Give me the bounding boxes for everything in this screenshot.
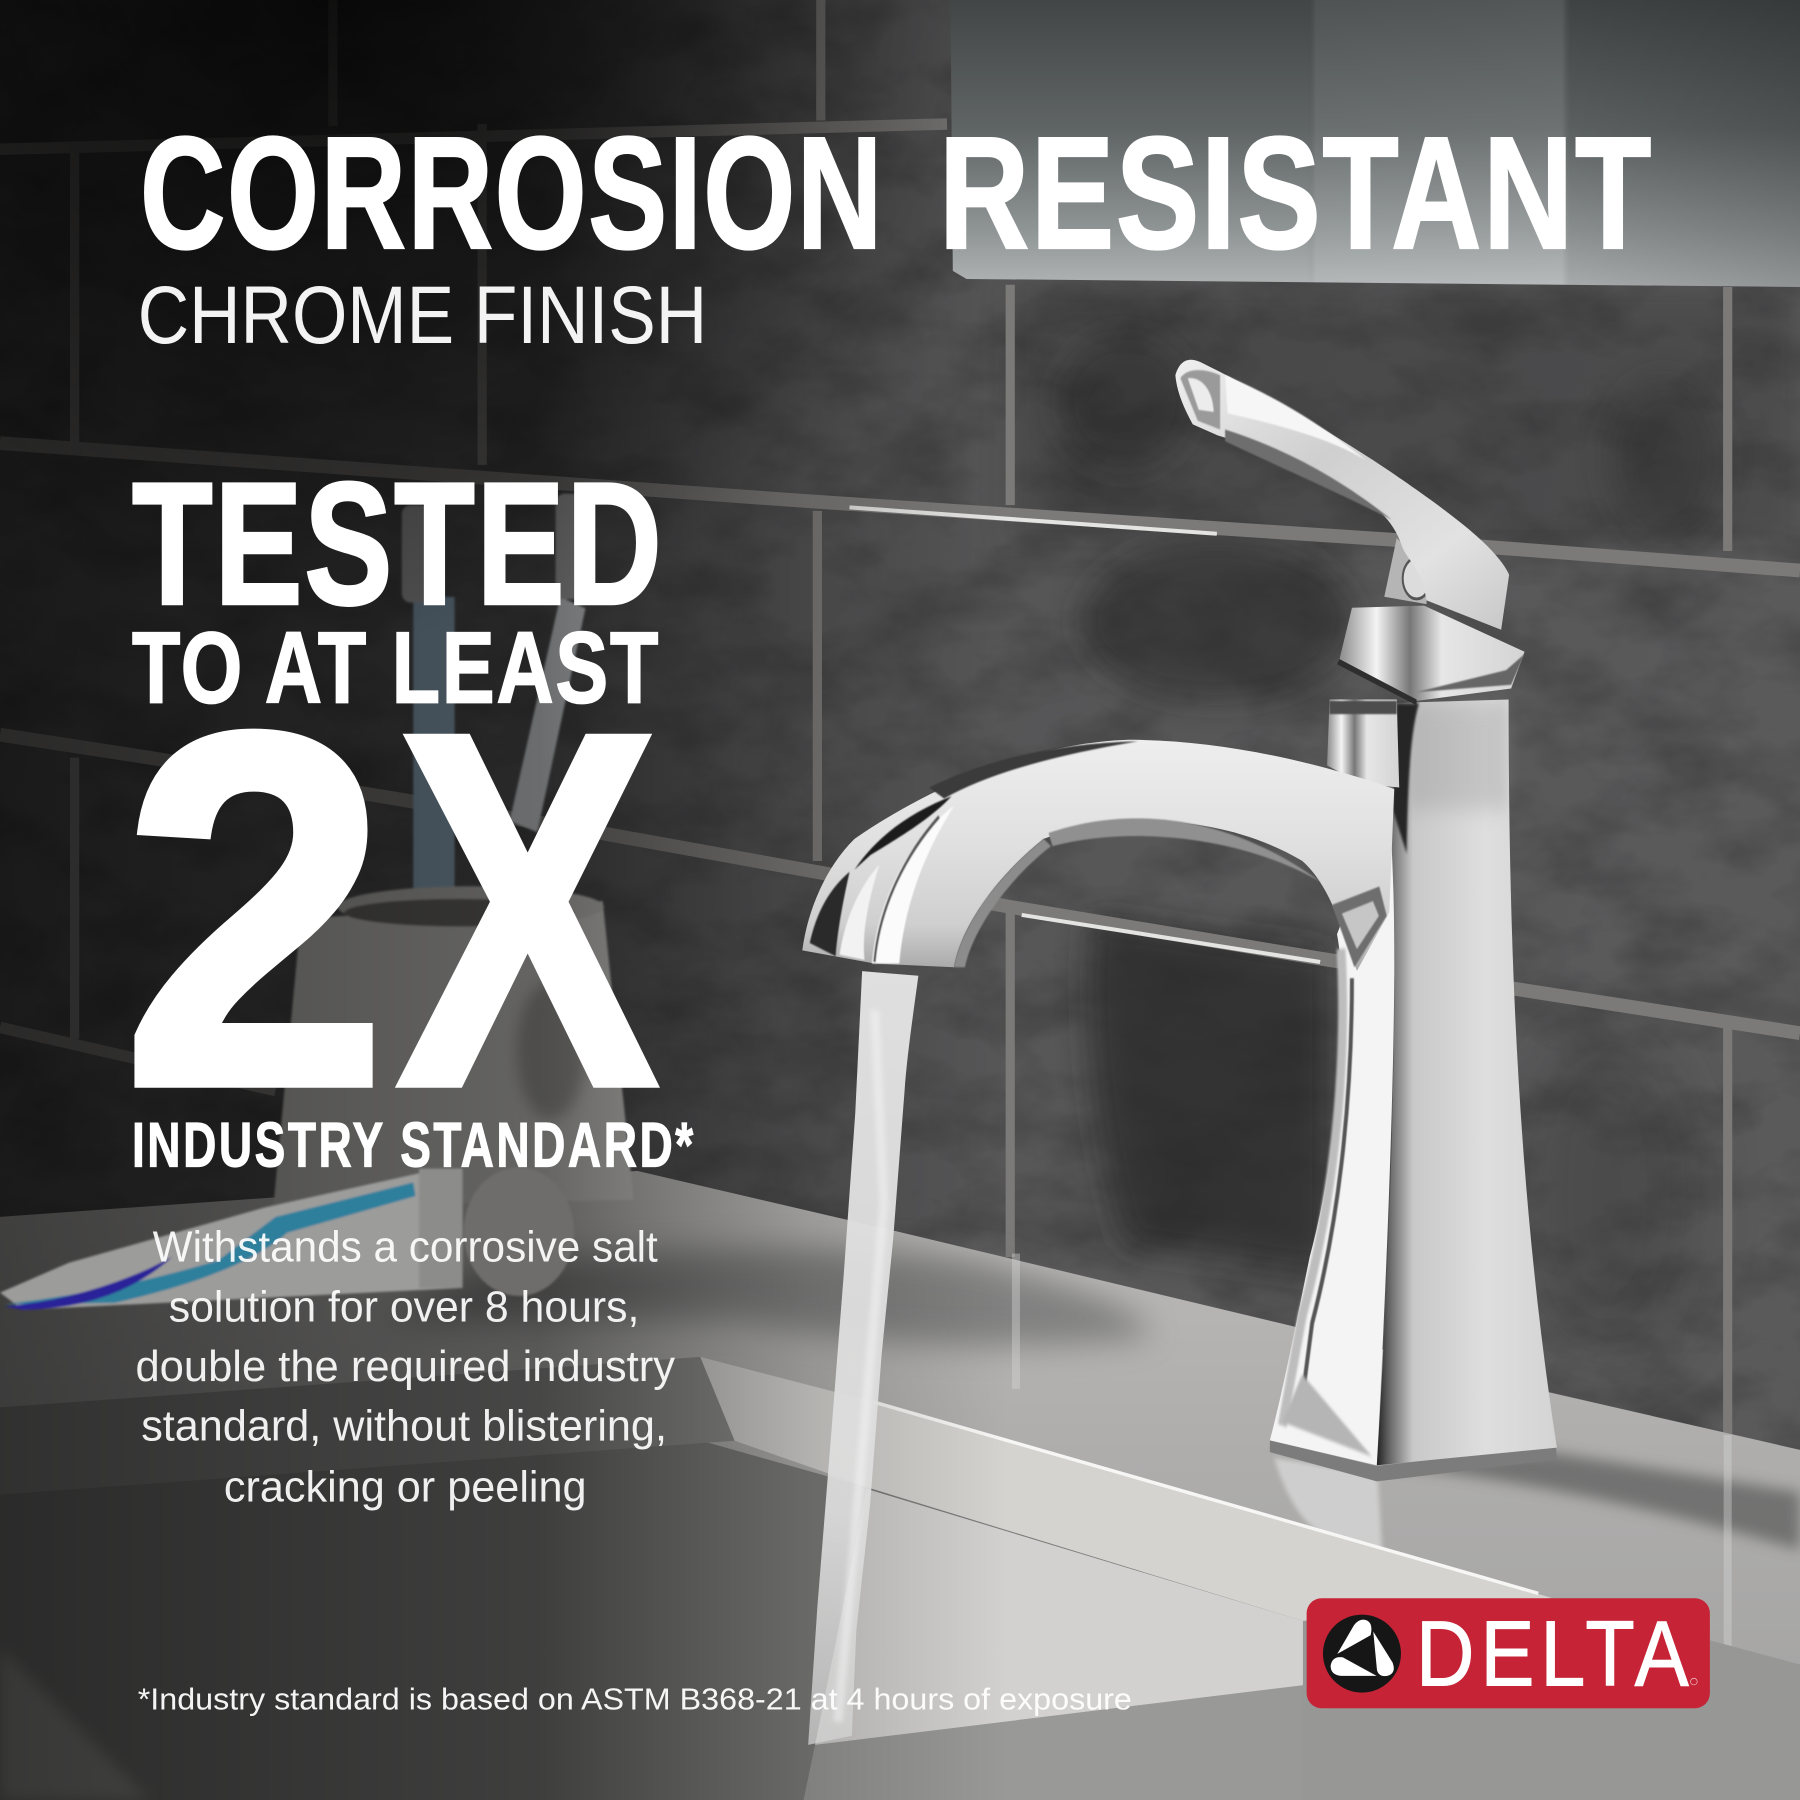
claim: industry standard: INDUSTRY STANDARD* [132,1110,696,1180]
spout reflections [810,741,1387,967]
claim: to at least: TO AT LEAST [132,613,660,725]
handle stem [1384,538,1427,604]
countertop [0,1171,1800,1800]
lit basin wall [815,1489,1303,1745]
running water [808,971,918,1745]
faucet base [1270,1440,1557,1481]
body description [135,1224,675,1512]
body description: solution for over 8 hours, [169,1283,639,1331]
claim: tested: TESTED [132,446,664,641]
neck [1327,699,1399,787]
heading: CORROSION [140,104,884,282]
sink interior [0,1437,1303,1800]
toothbrush cup [273,886,634,1208]
Delta logo: DELTA [1416,1602,1695,1706]
Delta logo [1307,1598,1710,1708]
spout [802,740,1394,971]
logo mark [1331,1620,1394,1676]
claim: 2X [122,629,660,1191]
footnote: *Industry standard is based on ASTM B368-21 at 4 hours of exposure [138,1681,1132,1716]
faucet body left face [1270,795,1394,1465]
body description: double the required industry [135,1343,675,1391]
mirror [951,0,1800,287]
body description: Withstands a corrosive salt [153,1224,658,1272]
lever handle [1175,360,1509,630]
lower basin shade [804,1685,1552,1800]
claim: 2X: 2 [122,629,388,1191]
body description: standard, without blistering, [141,1403,667,1451]
subheading: CHROME FINISH [138,270,707,361]
lower basin and front edge [0,1357,1800,1800]
heading [140,104,1653,282]
left sink rim [0,1357,735,1495]
front edge band [700,1357,1552,1621]
claim: 2X: X [397,629,660,1191]
collar [1340,606,1525,701]
toothpaste tube [0,1167,574,1310]
toothbrushes [402,494,585,918]
grout lines [0,0,1800,1435]
faucet [802,360,1557,1481]
faucet body right face [1377,699,1557,1465]
body description: cracking or peeling [224,1464,587,1512]
